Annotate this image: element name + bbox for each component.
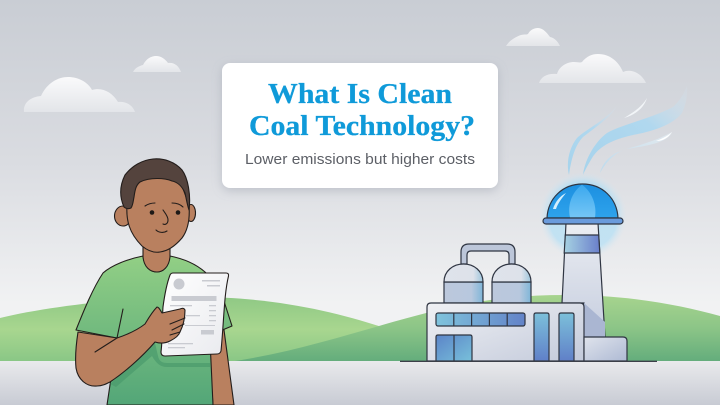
brows (145, 203, 183, 207)
cloud: small left (133, 56, 181, 72)
shirt (76, 256, 232, 405)
cloud: large left (24, 77, 135, 112)
window strip (436, 313, 525, 326)
ear left (114, 206, 132, 226)
door (436, 335, 472, 361)
dome glow (539, 172, 627, 260)
neck (143, 240, 170, 272)
ground line (400, 360, 657, 362)
subtitle: Lower emissions but higher costs (245, 152, 475, 168)
tall window right (559, 313, 574, 361)
fingers (170, 318, 185, 335)
ear right (186, 204, 196, 222)
title card (222, 63, 498, 188)
tall window left (534, 313, 549, 361)
main building (427, 303, 584, 361)
ground (0, 361, 720, 405)
base block (584, 337, 627, 361)
tank right (492, 264, 531, 303)
hills (0, 295, 720, 362)
shirt shadow (110, 343, 210, 387)
chimney tower (562, 223, 605, 337)
hair (121, 159, 190, 210)
arm and hand (76, 307, 185, 386)
factory (427, 184, 627, 361)
arm crease (95, 338, 117, 352)
pipe (461, 244, 515, 264)
smoke wisps (568, 86, 687, 175)
mouth (156, 230, 167, 232)
tank left (444, 264, 483, 303)
man (76, 159, 234, 405)
face (127, 175, 189, 252)
sleeve fold (117, 309, 123, 338)
paper (161, 273, 229, 356)
cloud: small right (506, 28, 560, 46)
title line two: Coal Technology? (249, 110, 475, 142)
nose (163, 210, 168, 224)
title: What Is Clean (268, 78, 452, 110)
dome (543, 184, 623, 224)
cloud: large right (539, 54, 646, 83)
eyes (150, 210, 154, 215)
far arm (209, 325, 234, 405)
